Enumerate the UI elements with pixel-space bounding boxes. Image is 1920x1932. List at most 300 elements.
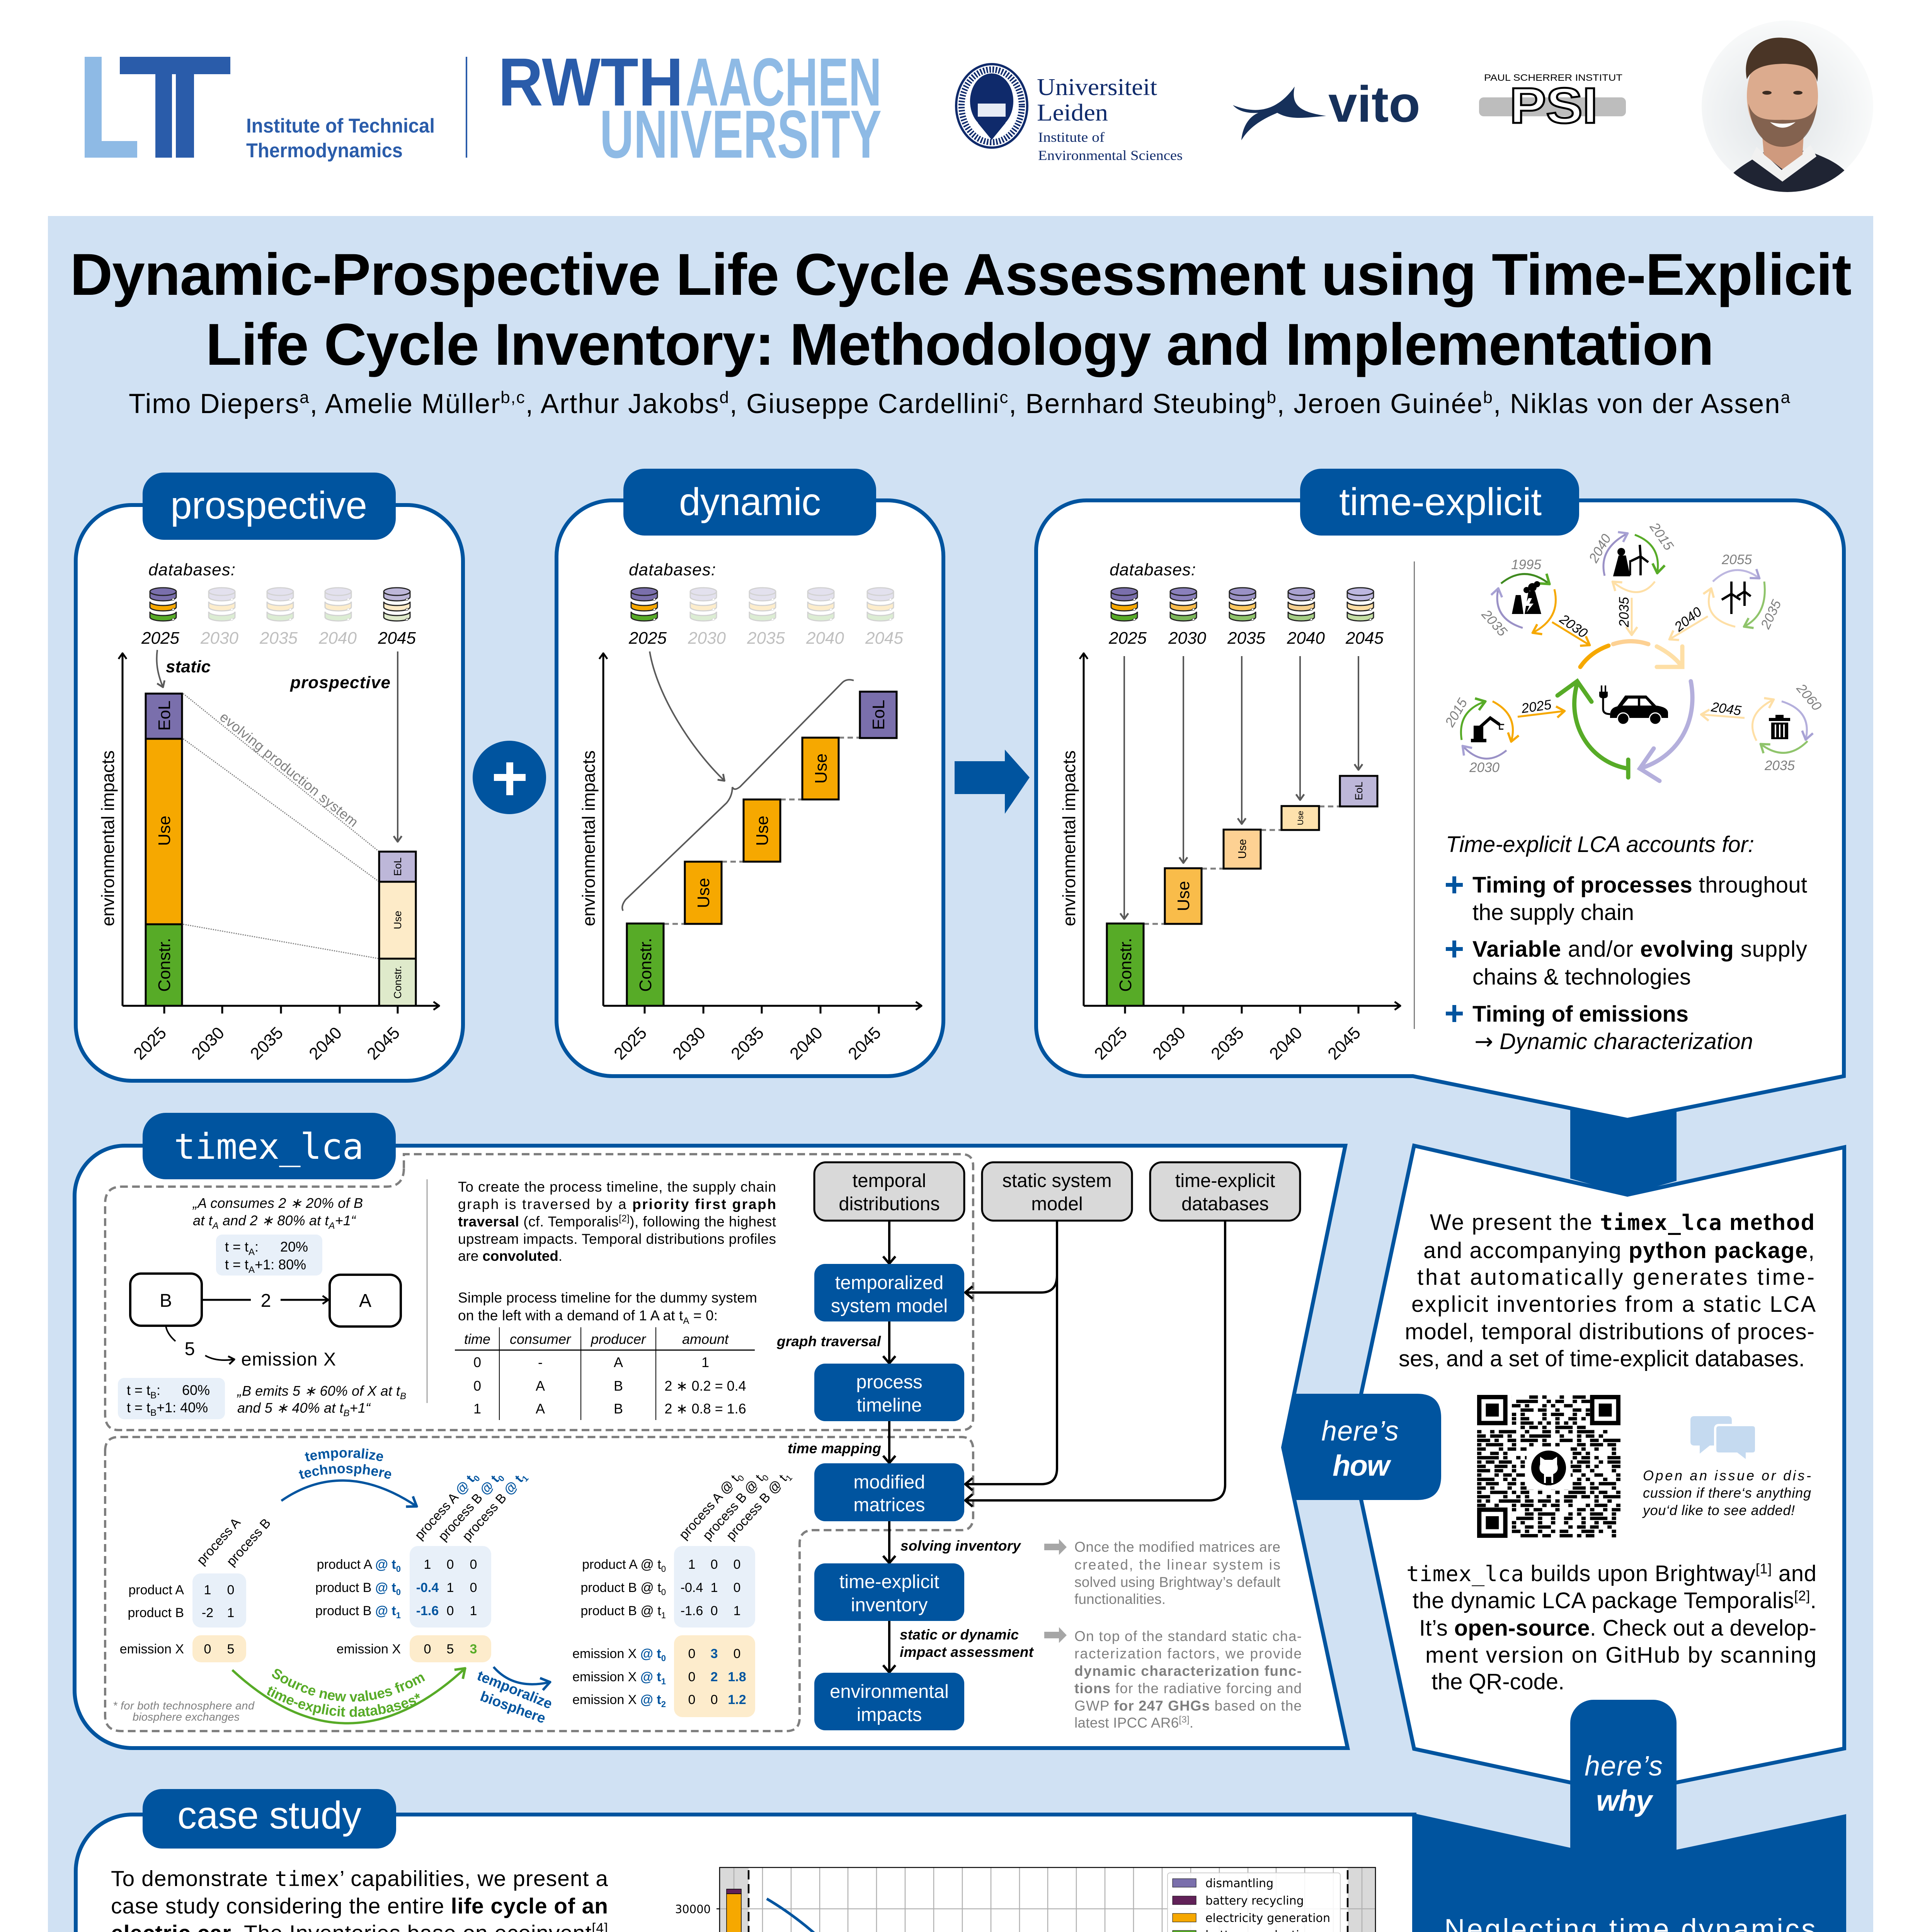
- step labels: static or dynamic: [900, 1627, 1019, 1643]
- text: method intro: and accompanying python package,: [1423, 1238, 1814, 1263]
- text: solving notes: Once the modified matrices are: [1074, 1539, 1280, 1555]
- diagram: dummy system B to A: emission X: [241, 1349, 336, 1370]
- databases row: 2040: [806, 629, 844, 648]
- text: builds upon Brightway: timex_lca builds upon Brightway: [1406, 1561, 1755, 1586]
- text: solving notes: latest IPCC AR6: [1074, 1715, 1179, 1731]
- diagram: matrices: 1: [784, 1473, 794, 1483]
- diagram: matrices: emission X @ t: [572, 1692, 661, 1707]
- text: process timeline explanation: upstream impacts. Temporal distributions profiles: [458, 1231, 776, 1247]
- year labels: 2035: [1617, 597, 1632, 628]
- diagram: matrices: 1: [424, 1557, 431, 1572]
- chart: time-explicit bars: 2030: [1149, 1023, 1189, 1063]
- year labels: 2045: [1710, 699, 1742, 718]
- diagram: dummy system B to A: t = t: [225, 1257, 249, 1272]
- chart: dynamic bars: 2030: [669, 1023, 709, 1063]
- year labels: 2055: [1721, 552, 1752, 567]
- databases row: 2030: [688, 629, 726, 648]
- label tab: here's how: here’s: [1321, 1416, 1399, 1447]
- table: process timeline: B: [614, 1378, 623, 1394]
- logo: LTT Institute of Technical Thermodynamics: [85, 57, 467, 162]
- connector arrows: [889, 1221, 1225, 1673]
- diagram: matrices: 1.8: [728, 1670, 746, 1684]
- logo: Universiteit Leiden: [956, 64, 1183, 163]
- diagram: matrices: 1: [688, 1557, 695, 1572]
- table: process timeline: 2 ∗ 0.8 = 1.6: [664, 1401, 746, 1417]
- table: process timeline: B: [614, 1401, 623, 1417]
- table: process timeline: time: [464, 1331, 490, 1347]
- authors: , Jeroen Guinée: [1277, 389, 1482, 419]
- step labels: impact assessment: [900, 1644, 1034, 1660]
- diagram: matrices: product B @ t: [315, 1604, 396, 1618]
- title: Life Cycle Inventory: Methodology and Implementation: [206, 311, 1714, 378]
- chart: time-explicit bars: 2035: [1207, 1023, 1248, 1063]
- text: solving notes: solved using Brightway’s default: [1074, 1574, 1281, 1590]
- heading: dynamic: [623, 469, 876, 536]
- diagram: matrices: 0: [496, 1473, 506, 1483]
- diagram: matrices: [113, 1445, 794, 1726]
- diagram: matrices: 3: [711, 1646, 718, 1661]
- icon: speech bubbles: [1690, 1416, 1756, 1461]
- text: call to open an issue: you‘d like to see added!: [1642, 1502, 1795, 1518]
- diagram: matrices: 1: [661, 1611, 666, 1620]
- dashed group outlines: [105, 1154, 973, 1731]
- diagram: matrices: 1: [711, 1580, 718, 1595]
- authors: , Amelie Müller: [310, 389, 500, 419]
- process boxes: inventory: [851, 1595, 928, 1616]
- table: process timeline: A: [536, 1401, 545, 1417]
- heading: dynamic: dynamic: [679, 480, 821, 524]
- diagram: dummy system B to A: [118, 1195, 406, 1419]
- step labels: solving inventory: [900, 1538, 1021, 1554]
- diagram: matrices: 0: [447, 1604, 454, 1618]
- logo: RWTH Aachen University: AACHEN: [686, 44, 882, 120]
- text: method intro: model, temporal distributions of proces-: [1405, 1319, 1814, 1344]
- diagram: matrices: process A: [194, 1515, 243, 1568]
- diagram: matrices: 5: [227, 1642, 234, 1656]
- databases row: [628, 560, 903, 648]
- diagram: matrices: 1: [661, 1677, 666, 1686]
- diagram: matrices: 1.2: [728, 1692, 746, 1707]
- diagram: matrices: product B @ t: [580, 1604, 661, 1618]
- diagram: matrices: 0: [688, 1646, 695, 1661]
- databases row: 2025: [628, 629, 667, 648]
- chart: time-explicit bars: 2040: [1266, 1023, 1306, 1063]
- text: solving notes: created, the linear system is: [1074, 1557, 1280, 1573]
- diagram: dummy system B to A: B: [400, 1391, 406, 1401]
- text: process timeline explanation: To create the process timeline, the supply chain: [458, 1179, 776, 1195]
- authors: d: [719, 388, 729, 407]
- diagram: matrices: 0: [711, 1604, 718, 1618]
- text: method intro: [1399, 1210, 1816, 1371]
- diagram: matrices: process B @ t: [700, 1472, 766, 1543]
- text: solving notes: On top of the standard static cha-: [1074, 1628, 1302, 1644]
- chart: dynamic bars: environmental impacts: [579, 750, 599, 926]
- chart: dynamic bars: 2040: [786, 1023, 826, 1063]
- diagram: matrices: product B @ t: [580, 1580, 661, 1595]
- chart legend: dismantling: [1205, 1877, 1273, 1890]
- process boxes: system model: [831, 1296, 948, 1316]
- diagram: matrices: process A @ t: [676, 1472, 742, 1542]
- diagram: matrices: emission X: [120, 1642, 184, 1656]
- table: process timeline: [455, 1327, 755, 1420]
- input boxes: model: [1031, 1194, 1083, 1214]
- diagram: matrices: 0: [711, 1692, 718, 1707]
- input boxes: [814, 1162, 1300, 1221]
- diagram: matrices: process B: [224, 1516, 274, 1569]
- diagram: matrices: Source new values from: [269, 1665, 427, 1705]
- table: process timeline: 1: [473, 1401, 481, 1417]
- chart: time-explicit bars: 2045: [1324, 1023, 1364, 1063]
- sub-cycle: robot production: [1461, 701, 1565, 759]
- text: process timeline explanation: graph is traversed by a priority first graph: [458, 1196, 776, 1212]
- text: builds upon Brightway: .: [1810, 1588, 1816, 1613]
- diagram: matrices: 1: [447, 1580, 454, 1595]
- databases row: 2030: [200, 629, 238, 648]
- diagram: matrices: 0: [688, 1670, 695, 1684]
- logo: RWTH Aachen University: RWTH: [498, 44, 683, 120]
- panel: case study: [76, 1789, 1414, 1932]
- table: process timeline: amount: [682, 1331, 729, 1347]
- panel: here's why: why: [1596, 1784, 1654, 1817]
- chart: prospective bars: 2040: [305, 1023, 346, 1063]
- step labels: [776, 1333, 1034, 1660]
- diagram: matrices: 1: [204, 1583, 211, 1597]
- diagram: matrices: product A @ t: [317, 1557, 396, 1572]
- chart: prospective bars: Use: [155, 816, 174, 846]
- label tab: here's how: [1282, 1394, 1441, 1500]
- databases row: 2030: [1168, 629, 1206, 648]
- databases row: databases:: [148, 560, 235, 579]
- logo: Universiteit Leiden: Universiteit: [1037, 74, 1157, 100]
- diagram: matrices: process B @ t: [723, 1472, 790, 1543]
- portrait photo: [1702, 20, 1873, 193]
- diagram: dummy system B to A: B: [150, 1408, 157, 1418]
- text: solving notes: tions for the radiative forcing and: [1074, 1680, 1302, 1696]
- databases row: 2045: [1345, 629, 1384, 648]
- logo: Paul Scherrer Institut: PSI: [1510, 77, 1598, 134]
- chart: time-explicit bars: Use: [1236, 839, 1249, 859]
- databases row: 2035: [1227, 629, 1265, 648]
- databases row: 2040: [318, 629, 357, 648]
- logo: Paul Scherrer Institut: [1479, 73, 1626, 134]
- databases row: databases:: [629, 560, 716, 579]
- diagram: dummy system B to A: „A consumes 2 ∗ 20% of B: [192, 1195, 363, 1211]
- authors: , Niklas von der Assen: [1493, 389, 1780, 419]
- logo: Paul Scherrer Institut: PAUL SCHERRER INSTITUT: [1484, 73, 1622, 83]
- input boxes: temporal: [853, 1170, 926, 1191]
- table: process timeline: 0: [473, 1378, 481, 1394]
- diagram: dummy system B to A: A: [249, 1247, 255, 1257]
- diagram: dummy system B to A: A: [359, 1291, 371, 1311]
- table: process timeline: 2 ∗ 0.2 = 0.4: [664, 1378, 746, 1394]
- logo: Universiteit Leiden: Institute of: [1038, 129, 1105, 145]
- main cycle arcs: [1557, 641, 1692, 781]
- panel: here's why: [1412, 1700, 1846, 1932]
- year labels: 2015: [1647, 520, 1677, 553]
- chart: dynamic bars: EoL: [869, 700, 888, 730]
- diagram: time-explicit supply chain cycles: [1442, 520, 1825, 781]
- logo: VITO: vito: [1328, 76, 1420, 133]
- chart: time-explicit bars: Constr.: [1116, 938, 1135, 992]
- diagram: dummy system B to A: 20%: [280, 1239, 308, 1255]
- heading: time-explicit: [1300, 469, 1579, 536]
- text: case study description: To demonstrate timex’ capabilities, we present a: [111, 1866, 608, 1891]
- panel: prospective: [76, 473, 463, 1081]
- year labels: 2030: [1557, 611, 1590, 641]
- diagram: dummy system B to A: and 5 ∗ 40% at t: [237, 1400, 343, 1416]
- diagram: matrices: product B @ t: [315, 1580, 396, 1595]
- step labels: time mapping: [788, 1440, 881, 1456]
- diagram: matrices: 0: [471, 1473, 482, 1483]
- logo: RWTH Aachen University: UNIVERSITY: [600, 97, 882, 172]
- text: builds upon Brightway: [1406, 1561, 1816, 1694]
- chart: prospective bars: EoL: [392, 857, 403, 876]
- diagram: dummy system B to A: B: [150, 1390, 157, 1401]
- diagram: matrices: 1: [396, 1611, 401, 1620]
- text: solving notes: functionalities.: [1074, 1591, 1166, 1607]
- text: call to open an issue: Open an issue or dis-: [1643, 1468, 1811, 1483]
- text: process timeline explanation: = 0:: [689, 1308, 718, 1323]
- chart legend: battery recycling: [1205, 1894, 1304, 1908]
- authors: , Giuseppe Cardellini: [730, 389, 999, 419]
- table: process timeline: consumer: [510, 1331, 572, 1347]
- diagram: dummy system B to A: :: [157, 1382, 160, 1398]
- connector between panels: [1570, 1108, 1677, 1195]
- input boxes: time-explicit: [1175, 1170, 1275, 1191]
- authors: b,c: [500, 388, 525, 407]
- text: solving notes: .: [1190, 1715, 1193, 1731]
- text: time-explicit LCA accounts for: [1446, 832, 1807, 1054]
- heading: prospective: prospective: [170, 484, 367, 527]
- chart: time-explicit bars: [1059, 653, 1401, 1063]
- diagram: matrices: 2: [661, 1699, 666, 1709]
- year labels: [1442, 520, 1825, 775]
- diagram: matrices: biosphere exchanges: [133, 1711, 240, 1723]
- authors: b: [1483, 388, 1493, 407]
- process boxes: modified: [853, 1472, 925, 1493]
- diagram: dummy system B to A: A: [249, 1265, 255, 1275]
- chart: dynamic bars: 2035: [727, 1023, 768, 1063]
- text: builds upon Brightway: ment version on GitHub by scanning: [1425, 1643, 1816, 1668]
- diagram: matrices: -0.4: [681, 1580, 703, 1595]
- arrow: to time-explicit: [955, 750, 1030, 814]
- text: process timeline explanation: on the left with a demand of 1 A at t: [458, 1308, 683, 1323]
- text: case study description: [111, 1866, 608, 1932]
- chart: dynamic bars: Use: [812, 753, 831, 784]
- diagram: matrices: temporalize: [303, 1445, 385, 1465]
- process boxes: [814, 1264, 964, 1730]
- year labels: 2035: [1764, 758, 1795, 773]
- databases row: 2045: [378, 629, 416, 648]
- label tab: here's how: how: [1333, 1449, 1392, 1482]
- diagram: matrices: 0: [661, 1587, 666, 1597]
- databases row: [141, 560, 416, 648]
- chart legend: electricity generation: [1205, 1912, 1330, 1925]
- text: process timeline explanation: A: [683, 1316, 689, 1326]
- diagram: dummy system B to A: +1“: [350, 1400, 371, 1416]
- text: call to open an issue: cussion if there‘s anything: [1643, 1485, 1811, 1501]
- authors: Timo Diepers: [129, 389, 299, 419]
- diagram: matrices: emission X @ t: [572, 1646, 661, 1661]
- heading: timex_lca: timex_lca: [174, 1126, 364, 1167]
- step labels: graph traversal: [776, 1333, 881, 1349]
- diagram: matrices: time-explicit databases*: [264, 1682, 424, 1720]
- diagram: matrices: -2: [202, 1605, 213, 1620]
- diagram: matrices: product A: [128, 1583, 184, 1597]
- diagram: matrices: 1: [520, 1473, 530, 1483]
- year labels: 2040: [1671, 604, 1705, 635]
- diagram: matrices: 1: [470, 1604, 477, 1618]
- chart: prospective bars: EoL: [155, 701, 174, 731]
- process boxes: time-explicit: [839, 1571, 940, 1592]
- text: solving notes: [1044, 1539, 1302, 1731]
- diagram: matrices: 0: [470, 1580, 477, 1595]
- title: [70, 242, 1852, 378]
- input boxes: databases: [1181, 1194, 1269, 1214]
- chart: time-explicit bars: 2025: [1091, 1023, 1131, 1063]
- chart: prospective bars: [98, 650, 439, 1063]
- text: builds upon Brightway: the QR-code.: [1431, 1669, 1564, 1694]
- diagram: dummy system B to A: +1: 40%: [157, 1400, 208, 1415]
- diagram: matrices: 0: [470, 1557, 477, 1572]
- table: process timeline: producer: [591, 1331, 647, 1347]
- databases row: 2035: [747, 629, 785, 648]
- text: builds upon Brightway: It’s open-source. Check out a develop-: [1419, 1616, 1816, 1641]
- text: process timeline explanation: Simple process timeline for the dummy system: [458, 1290, 757, 1306]
- heading: timex_lca: [143, 1113, 396, 1179]
- databases row: 2035: [259, 629, 298, 648]
- table: process timeline: 0: [473, 1354, 481, 1370]
- sub-cycle: coal plant: [1497, 574, 1590, 645]
- diagram: matrices: temporalize: [475, 1667, 555, 1712]
- text: method intro: explicit inventories from a static LCA: [1411, 1292, 1816, 1317]
- year labels: 2035: [1478, 607, 1510, 639]
- diagram: dummy system B to A: at t: [193, 1213, 212, 1228]
- text: time-explicit LCA accounts for: the supply chain: [1472, 900, 1634, 925]
- text: process timeline explanation: [2]: [619, 1213, 630, 1224]
- text: builds upon Brightway: [2]: [1794, 1588, 1810, 1604]
- authors: , Bernhard Steubing: [1009, 389, 1266, 419]
- chart: prospective bars: environmental impacts: [98, 750, 118, 926]
- panel: here's why: here’s: [1585, 1751, 1663, 1782]
- diagram: matrices: product A @ t: [582, 1557, 661, 1572]
- heading: prospective: [143, 473, 396, 540]
- chart: time-explicit bars: environmental impacts: [1059, 750, 1079, 926]
- text: case study description: case study considering the entire life cycle of an: [111, 1894, 608, 1918]
- diagram: matrices: 0: [760, 1473, 771, 1483]
- diagram: matrices: 0: [734, 1646, 740, 1661]
- panel: here's how: [1361, 1146, 1844, 1782]
- chart: dynamic bars: 2025: [610, 1023, 650, 1063]
- diagram: matrices: process B @ t: [436, 1472, 502, 1544]
- databases row: databases:: [1110, 560, 1196, 579]
- chart: time-explicit bars: Use: [1174, 881, 1193, 911]
- diagram: matrices: -1.6: [681, 1604, 703, 1618]
- table: process timeline: 1: [701, 1354, 709, 1370]
- panel: timex_lca: [75, 1113, 1348, 1748]
- diagram: matrices: 0: [447, 1557, 454, 1572]
- databases row: 2025: [141, 629, 179, 648]
- diagram: dummy system B to A: B: [160, 1291, 172, 1311]
- diagram: dummy system B to A: t = t: [225, 1239, 249, 1255]
- diagram: dummy system B to A: +1“: [335, 1213, 356, 1228]
- diagram: dummy system B to A: t = t: [127, 1400, 150, 1415]
- diagram: dummy system B to A: A: [328, 1221, 335, 1231]
- text: builds upon Brightway: and: [1772, 1561, 1816, 1586]
- diagram: dummy system B to A: A: [212, 1221, 219, 1231]
- text: solving notes: racterization factors, we provide: [1074, 1646, 1302, 1662]
- text: process timeline explanation: ), following the highest: [630, 1214, 776, 1230]
- diagram: dummy system B to A: 5: [185, 1339, 195, 1359]
- text: process timeline explanation: [458, 1179, 776, 1326]
- text: time-explicit LCA accounts for: → Dynamic characterization: [1474, 1028, 1753, 1054]
- callout: x0.5 arrow: [767, 1899, 936, 1932]
- text: process timeline explanation: traversal (cf. Temporalis: [458, 1214, 619, 1230]
- chart: prospective bars: Constr.: [392, 966, 403, 999]
- input boxes: static system: [1002, 1170, 1112, 1191]
- logo: VITO: [1233, 76, 1420, 140]
- year labels: 2025: [1520, 697, 1552, 716]
- logo: Universiteit Leiden: Leiden: [1037, 100, 1108, 126]
- diagram: dummy system B to A: 2: [261, 1291, 271, 1311]
- logo: Universiteit Leiden: Environmental Sciences: [1038, 148, 1183, 163]
- chart legend: [1168, 1873, 1340, 1932]
- diagram: matrices: 0: [204, 1642, 211, 1656]
- diagram: matrices: emission X: [337, 1642, 401, 1656]
- diagram: matrices: 0: [661, 1653, 666, 1663]
- diagram: matrices: 0: [736, 1473, 746, 1483]
- year labels: 2030: [1469, 760, 1500, 775]
- text: time-explicit LCA accounts for: Timing of emissions: [1472, 1002, 1689, 1027]
- text: builds upon Brightway: [1]: [1756, 1561, 1772, 1577]
- diagram: matrices: 0: [396, 1587, 401, 1597]
- logo: LTT Institute of Technical Thermodynamics: Institute of Technical: [246, 115, 435, 137]
- chart: prospective bars: prospective: [290, 673, 390, 692]
- chart: prospective bars: 2035: [247, 1023, 287, 1063]
- chart: dynamic bars: Use: [753, 816, 772, 846]
- diagram: matrices: 5: [447, 1642, 454, 1656]
- diagram: dummy system B to A: 60%: [182, 1382, 210, 1398]
- diagram: matrices: 2: [711, 1670, 718, 1684]
- process boxes: matrices: [853, 1495, 925, 1515]
- icon: plus sign: [473, 741, 546, 814]
- databases row: [1108, 560, 1384, 648]
- chart: prospective bars: 2045: [363, 1023, 403, 1063]
- process boxes: temporalized: [835, 1272, 943, 1293]
- chart: dynamic bars: Use: [694, 878, 713, 908]
- diagram: matrices: 0: [688, 1692, 695, 1707]
- chart: dynamic bars: Constr.: [636, 938, 655, 992]
- diagram: matrices: -0.4: [416, 1580, 439, 1595]
- authors: a: [300, 388, 309, 407]
- chart: prospective bars: evolving production system: [217, 709, 361, 830]
- chart: prospective bars: Use: [392, 911, 403, 929]
- diagram: matrices: 3: [470, 1642, 477, 1656]
- diagram: matrices: product B: [128, 1605, 184, 1620]
- year labels: 1995: [1511, 557, 1541, 572]
- text: builds upon Brightway: the dynamic LCA package Temporalis: [1413, 1588, 1794, 1613]
- diagram: matrices: process A @ t: [412, 1472, 477, 1543]
- diagram: matrices: 1: [227, 1605, 234, 1620]
- diagram: matrices: 0: [396, 1564, 401, 1574]
- text: method intro: that automatically generates time-: [1417, 1265, 1814, 1290]
- process boxes: process: [856, 1372, 923, 1393]
- text: time-explicit LCA accounts for: Variable and/or evolving supply: [1472, 937, 1807, 962]
- process boxes: environmental: [830, 1681, 949, 1702]
- databases row: 2045: [865, 629, 903, 648]
- year labels: 2060: [1793, 680, 1825, 714]
- diagram: matrices: technosphere: [297, 1460, 394, 1482]
